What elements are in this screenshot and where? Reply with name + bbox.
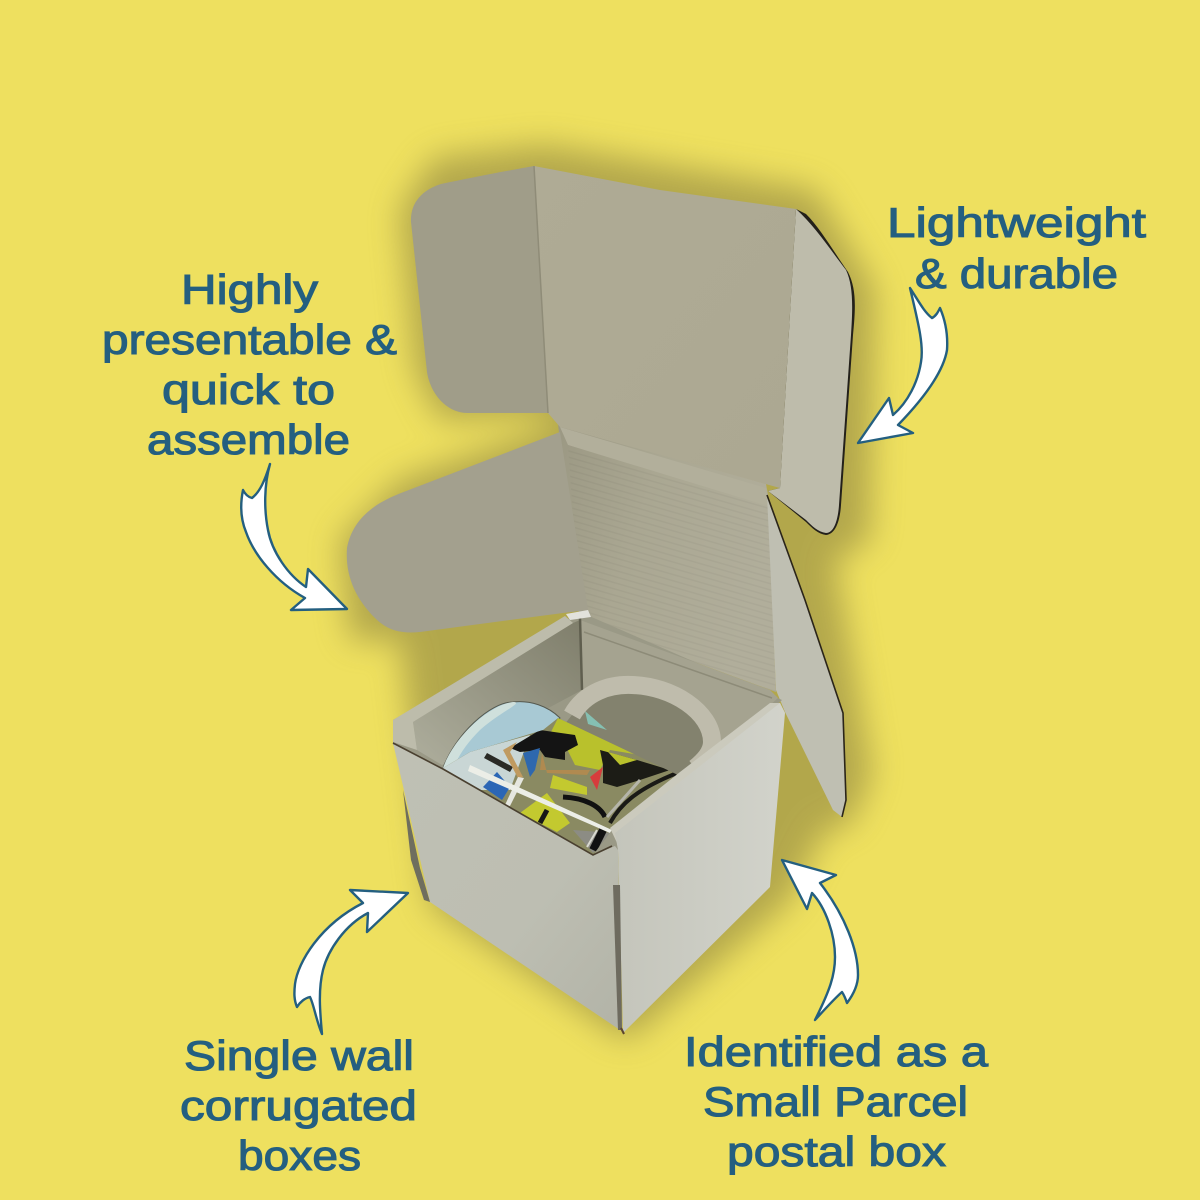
arrow: lightweight and durable bbox=[858, 288, 947, 443]
bottom corner edge bbox=[621, 1028, 624, 1034]
arrow: highly presentable bbox=[241, 464, 347, 610]
corrugation lines bbox=[568, 445, 776, 692]
inner left wall bbox=[413, 620, 582, 765]
left face bbox=[393, 743, 622, 1030]
text: lightweight and durable: Lightweight bbox=[887, 199, 1146, 246]
text: single wall corrugated boxes: boxes bbox=[238, 1132, 361, 1179]
right side flap bbox=[767, 495, 846, 817]
inner corner crease bbox=[580, 618, 582, 690]
lid: left crease bbox=[534, 166, 548, 413]
arrow: small parcel bbox=[782, 860, 858, 1020]
left dark seam bbox=[403, 790, 430, 902]
inner back wall bbox=[580, 620, 778, 775]
mug bbox=[430, 685, 712, 870]
text: lightweight and durable: & durable bbox=[915, 250, 1118, 297]
text: highly presentable and quick to assemble: Highly bbox=[181, 266, 318, 313]
text: lightweight and durable bbox=[887, 199, 1146, 297]
box body bbox=[393, 610, 785, 1034]
text: identified as a small parcel postal box: Small Parcel bbox=[703, 1078, 968, 1125]
text: single wall corrugated boxes: Single wall bbox=[184, 1032, 414, 1079]
right rim flap bbox=[610, 703, 785, 845]
text: identified as a small parcel postal box bbox=[684, 1028, 989, 1175]
mug print bbox=[443, 718, 677, 854]
left rim flap bbox=[393, 616, 573, 750]
open lid of box bbox=[347, 166, 855, 817]
text: highly presentable and quick to assemble: assemble bbox=[147, 416, 350, 463]
text: highly presentable and quick to assemble: presentable & bbox=[102, 316, 397, 363]
text: identified as a small parcel postal box: postal box bbox=[727, 1128, 946, 1175]
text: single wall corrugated boxes: corrugated bbox=[180, 1082, 417, 1129]
infographic: postal box with mug and callouts bbox=[104, 130, 1146, 1175]
lower left flap bbox=[347, 432, 588, 632]
lid: left flap bbox=[411, 166, 548, 413]
silver tape bbox=[566, 610, 591, 620]
drop shadow of box bbox=[340, 145, 875, 1040]
text: identified as a small parcel postal box: Identified as a bbox=[684, 1028, 989, 1075]
inner back wall crease bbox=[584, 632, 772, 698]
text: highly presentable and quick to assemble bbox=[102, 266, 397, 463]
lid: main top panel bbox=[534, 166, 796, 488]
text: highly presentable and quick to assemble: quick to bbox=[162, 366, 335, 413]
lid: back panel bbox=[558, 424, 776, 692]
interior base bbox=[393, 612, 782, 857]
lid: crease band bbox=[560, 427, 768, 506]
left face top edge bbox=[393, 743, 612, 855]
arrow: single wall corrugated bbox=[294, 890, 408, 1034]
mug rim, blue top bbox=[443, 702, 560, 790]
text: single wall corrugated boxes bbox=[180, 1032, 417, 1179]
right face bbox=[615, 703, 785, 1033]
lid: right flap bbox=[768, 209, 855, 535]
front corner seam bbox=[613, 885, 622, 1030]
mug handle bbox=[560, 685, 712, 780]
